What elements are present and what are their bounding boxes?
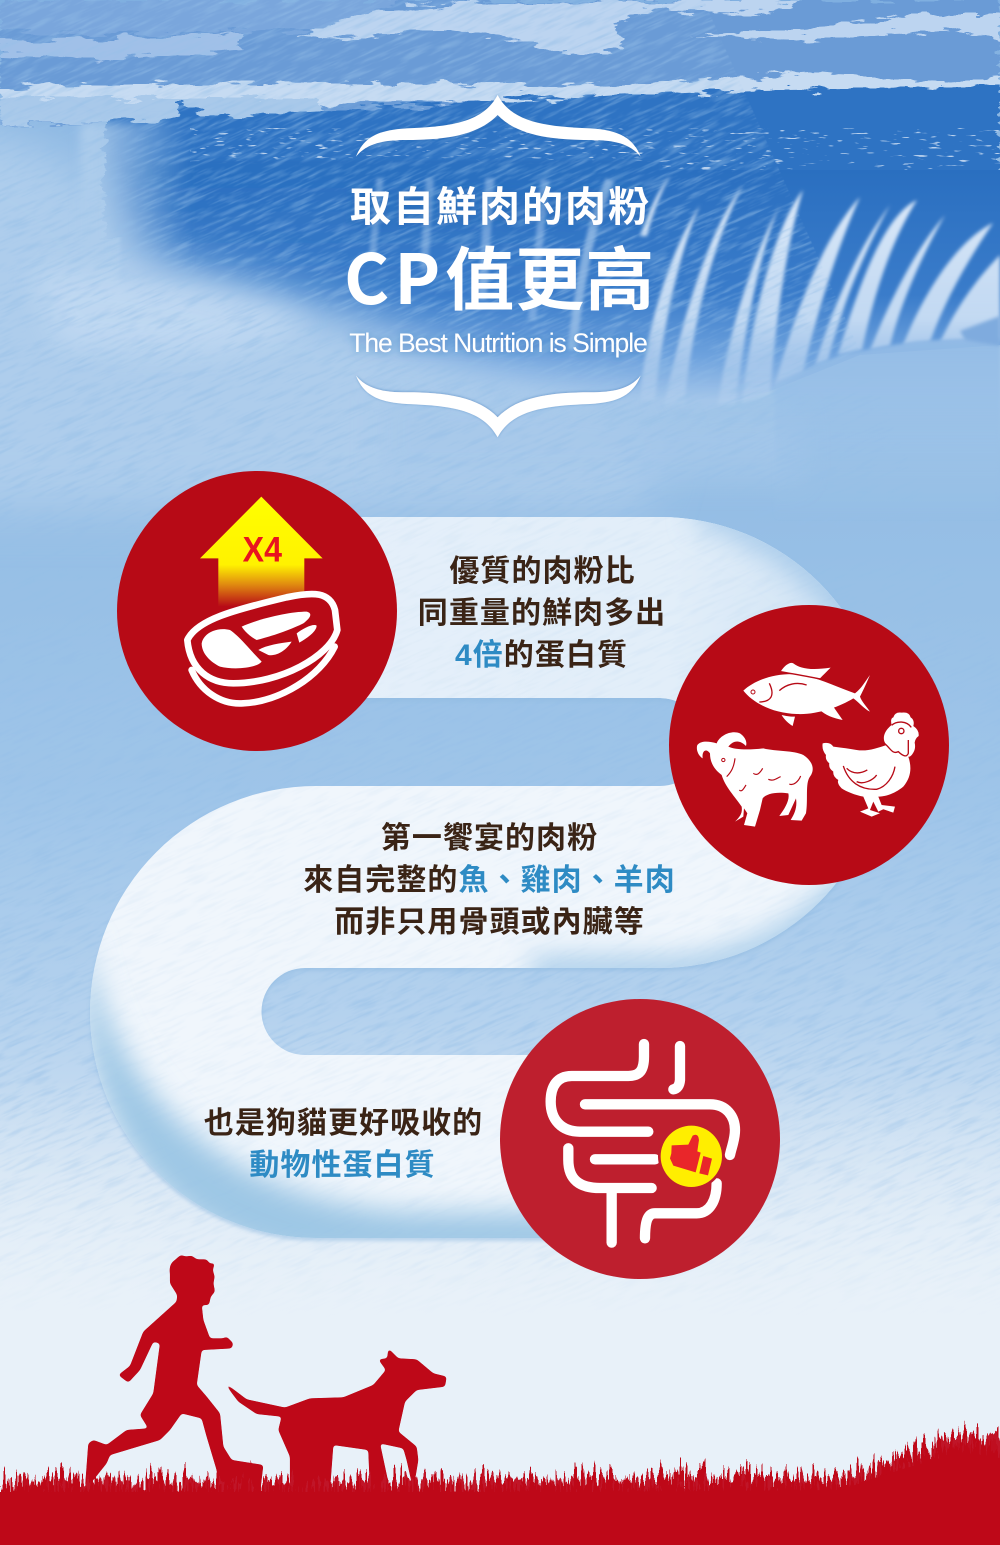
illustration: boy running xyxy=(85,1255,263,1493)
chicken xyxy=(822,713,919,817)
text block: whole fish, chicken, lamb xyxy=(303,822,676,939)
grass xyxy=(0,1438,1000,1545)
icon: meat with x4 arrow xyxy=(117,471,397,751)
thumb xyxy=(670,1135,712,1175)
title line 2: CP值更高 xyxy=(344,224,655,324)
text block: easier to absorb: 動物性蛋白質 xyxy=(249,1149,436,1182)
text block: easier to absorb: 也是狗貓更好吸收的 xyxy=(204,1107,483,1140)
intestine tract xyxy=(551,1044,735,1243)
arrow xyxy=(200,497,323,607)
mist over the left side xyxy=(0,125,660,510)
falls behind the title xyxy=(372,178,610,350)
top brace xyxy=(356,95,641,157)
text block: four times the protein: 優質的肉粉比 xyxy=(449,555,636,588)
ribbon shading xyxy=(83,505,870,1260)
icon: intestines with thumbs up xyxy=(500,999,780,1279)
text block: four times the protein: 同重量的鮮肉多出 xyxy=(418,597,666,630)
heading block xyxy=(344,95,655,437)
illustration: dog running xyxy=(223,1348,447,1490)
steak xyxy=(187,594,337,703)
text block: four times the protein xyxy=(418,555,666,672)
mist at the base of the falls xyxy=(380,385,800,480)
text block: easier to absorb xyxy=(204,1107,483,1182)
badge xyxy=(658,1123,725,1190)
text block: whole fish, chicken, lamb: 來自完整的魚、雞肉、羊肉 xyxy=(303,864,676,897)
dark falls left of centre xyxy=(120,160,660,420)
text block: whole fish, chicken, lamb: 第一饗宴的肉粉 xyxy=(381,822,598,855)
pool right of the falls xyxy=(775,337,1000,520)
bottom brace xyxy=(356,376,641,437)
falls rim with specks xyxy=(190,128,1000,173)
panel: serpentine ribbon xyxy=(90,517,842,1242)
clouds and treeline xyxy=(0,0,1000,240)
x4 label: X4 xyxy=(243,531,282,570)
text block: four times the protein: 4倍的蛋白質 xyxy=(455,639,628,672)
fish xyxy=(743,663,870,726)
sheep xyxy=(697,732,813,827)
subtitle: The Best Nutrition is Simple xyxy=(349,328,647,358)
waterfall xyxy=(630,170,1000,430)
title line 1: 取自鮮肉的肉粉 xyxy=(350,184,651,230)
icon: fish, sheep and chicken xyxy=(669,605,949,885)
text block: whole fish, chicken, lamb: 而非只用骨頭或內臟等 xyxy=(334,906,645,939)
